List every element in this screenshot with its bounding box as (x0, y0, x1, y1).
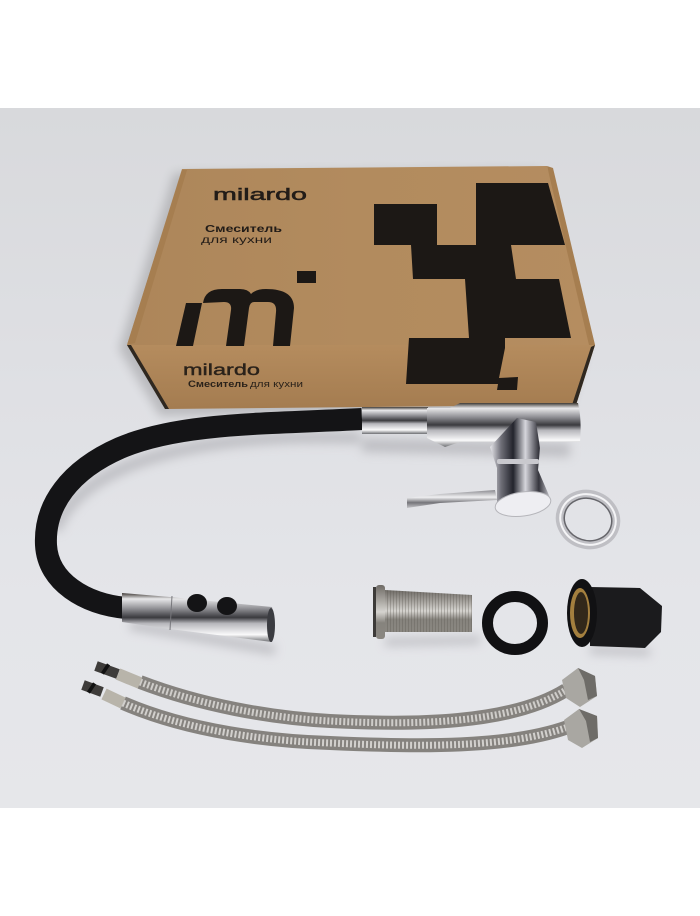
chrome ring (554, 487, 622, 552)
rubber gasket (488, 596, 542, 650)
black flexible hose (46, 419, 362, 608)
photo background (0, 108, 700, 808)
threaded sleeve (373, 585, 472, 639)
brand text on front: milardo (183, 362, 260, 379)
hose nut upper (562, 668, 597, 707)
product text on top: для кухни (201, 235, 272, 246)
box front face (127, 345, 595, 409)
product text on top (201, 224, 282, 246)
braided hose upper (96, 666, 566, 723)
cardboard box (119, 166, 595, 416)
logo: square dot (297, 271, 316, 283)
logo: large m (176, 289, 294, 346)
black pattern (374, 183, 571, 390)
body tube (427, 403, 581, 447)
lever rod (407, 490, 497, 508)
handle cap (494, 488, 552, 520)
collar (362, 407, 428, 434)
product text on front (188, 379, 303, 390)
spray buttons (187, 594, 207, 612)
hose nut lower (564, 709, 598, 748)
faucet body (362, 403, 581, 520)
handle (490, 418, 551, 507)
black nut with brass insert (567, 579, 662, 648)
box top face (127, 166, 595, 345)
shadows under faucet (55, 437, 650, 652)
product text on top: Смеситель (205, 224, 282, 235)
brand text on top: milardo (213, 185, 307, 204)
spray head (122, 593, 275, 642)
braided hose lower (83, 685, 568, 745)
product text on front: для кухни (250, 379, 303, 390)
product text on front: Смеситель (188, 379, 248, 390)
